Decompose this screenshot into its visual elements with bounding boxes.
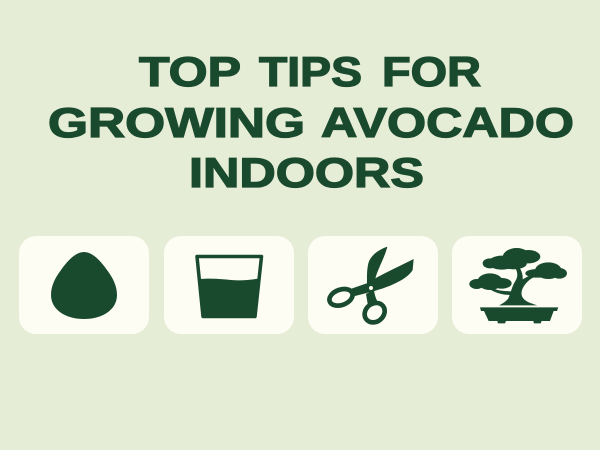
icon: scissors bbox=[327, 247, 414, 326]
title bbox=[48, 48, 574, 196]
icon: bonsai tree bbox=[469, 248, 567, 323]
panel: bonsai tree bbox=[452, 236, 582, 334]
title: INDOORS bbox=[189, 149, 424, 196]
title: GROWING bbox=[48, 99, 305, 146]
panel: avocado seed bbox=[19, 236, 149, 334]
panel: scissors bbox=[308, 236, 438, 334]
title: TIPS bbox=[259, 48, 362, 95]
title: AVOCADO bbox=[321, 99, 574, 146]
title: FOR bbox=[382, 48, 481, 95]
title: TOP bbox=[139, 48, 241, 95]
icon: avocado seed bbox=[51, 252, 117, 319]
icon: glass of water bbox=[197, 256, 262, 316]
panel: glass of water bbox=[164, 236, 294, 334]
